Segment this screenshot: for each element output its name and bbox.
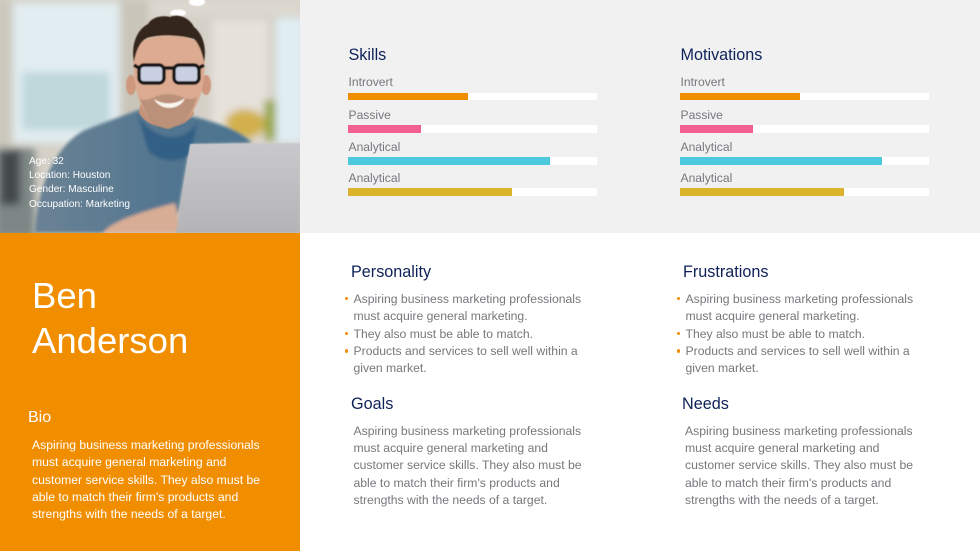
text: goals: able to match their firm's products and bbox=[354, 476, 560, 490]
heading: frustrations: Frustrations bbox=[683, 263, 768, 281]
panel: goals bbox=[351, 395, 582, 507]
bullet list: frustrations: must acquire general marketing. bbox=[686, 309, 860, 323]
bar: introvert bbox=[680, 93, 929, 100]
bar: passive bbox=[348, 125, 597, 133]
label: analytical second: Analytical bbox=[680, 171, 732, 185]
photo caption: demographics: Gender: Masculine bbox=[29, 184, 114, 195]
label: analytical: Analytical bbox=[348, 140, 400, 154]
heading: skills: Skills bbox=[348, 46, 386, 64]
bullet list: personality: Aspiring business marketing professionals bbox=[354, 292, 581, 306]
photo caption: demographics: Location: Houston bbox=[29, 170, 110, 181]
panel: motivations bbox=[680, 46, 929, 196]
panel: frustrations bbox=[677, 263, 913, 375]
text: goals: strengths with the needs of a target. bbox=[354, 493, 547, 507]
bar: analytical bbox=[348, 157, 597, 165]
label: analytical second: Analytical bbox=[348, 171, 400, 185]
text: needs: customer service skills. They also must be bbox=[685, 458, 913, 472]
text: needs: must acquire general marketing and bbox=[685, 441, 879, 455]
bar: analytical second bbox=[680, 188, 929, 196]
panel: orange profile bbox=[0, 233, 300, 551]
panel: personality bbox=[345, 263, 581, 375]
name: Anderson bbox=[32, 320, 188, 360]
text: needs bbox=[685, 424, 913, 507]
label: passive: Passive bbox=[348, 108, 391, 122]
sweater bbox=[35, 110, 252, 233]
bio text: must acquire general marketing and bbox=[32, 455, 226, 469]
bio text bbox=[32, 438, 260, 521]
heading: needs: Needs bbox=[682, 395, 729, 413]
text: goals bbox=[354, 424, 582, 507]
panel: skills bbox=[348, 46, 597, 196]
label: passive: Passive bbox=[680, 108, 723, 122]
text: needs: Aspiring business marketing professionals bbox=[685, 424, 913, 438]
name: Ben bbox=[32, 275, 97, 316]
label: analytical: Analytical bbox=[680, 140, 732, 154]
bio text: strengths with the needs of a target. bbox=[32, 507, 226, 521]
bar: introvert bbox=[348, 93, 597, 100]
text: goals: Aspiring business marketing professionals bbox=[354, 424, 581, 438]
label: introvert: Introvert bbox=[680, 75, 725, 89]
heading: goals: Goals bbox=[351, 395, 393, 413]
name bbox=[32, 275, 188, 360]
photo caption: demographics bbox=[29, 156, 130, 210]
text: needs: strengths with the needs of a target. bbox=[685, 493, 879, 507]
bullet list: frustrations: Products and services to sell well within a bbox=[686, 344, 910, 358]
bar: passive bbox=[680, 125, 929, 133]
bullet list: personality bbox=[345, 292, 581, 375]
photo caption: demographics: Age: 32 bbox=[29, 156, 64, 166]
bullet list: personality: given market. bbox=[354, 361, 427, 375]
panel: needs bbox=[682, 395, 913, 507]
panel: top grey background bbox=[300, 0, 980, 233]
bar: analytical bbox=[680, 157, 929, 165]
heading: personality: Personality bbox=[351, 263, 431, 281]
bar: analytical second bbox=[348, 188, 597, 196]
laptop bbox=[176, 143, 300, 233]
bullet list: frustrations: They also must be able to match. bbox=[686, 327, 865, 341]
photo caption: demographics: Occupation: Marketing bbox=[29, 199, 130, 210]
heading: motivations: Motivations bbox=[680, 46, 762, 64]
bio text: able to match their firm's products and bbox=[32, 490, 238, 504]
text: needs: able to match their firm's products and bbox=[685, 476, 891, 490]
label: introvert: Introvert bbox=[348, 75, 393, 89]
bio heading: Bio bbox=[28, 409, 51, 426]
bullet list: personality: must acquire general marketing. bbox=[354, 309, 528, 323]
text: goals: must acquire general marketing and bbox=[354, 441, 548, 455]
bullet list: frustrations: Aspiring business marketing professionals bbox=[686, 292, 913, 306]
text: goals: customer service skills. They also must be bbox=[354, 458, 582, 472]
bullet list: personality: They also must be able to match. bbox=[354, 327, 533, 341]
bio text: Aspiring business marketing professionals bbox=[32, 438, 260, 452]
bullet list: frustrations: given market. bbox=[686, 361, 759, 375]
photo: smiling man with glasses at laptop bbox=[0, 0, 300, 233]
bio text: customer service skills. They also must be bbox=[32, 473, 260, 487]
bullet list: personality: Products and services to sell well within a bbox=[354, 344, 578, 358]
neck and head bbox=[126, 16, 211, 129]
bullet list: frustrations bbox=[677, 292, 913, 375]
